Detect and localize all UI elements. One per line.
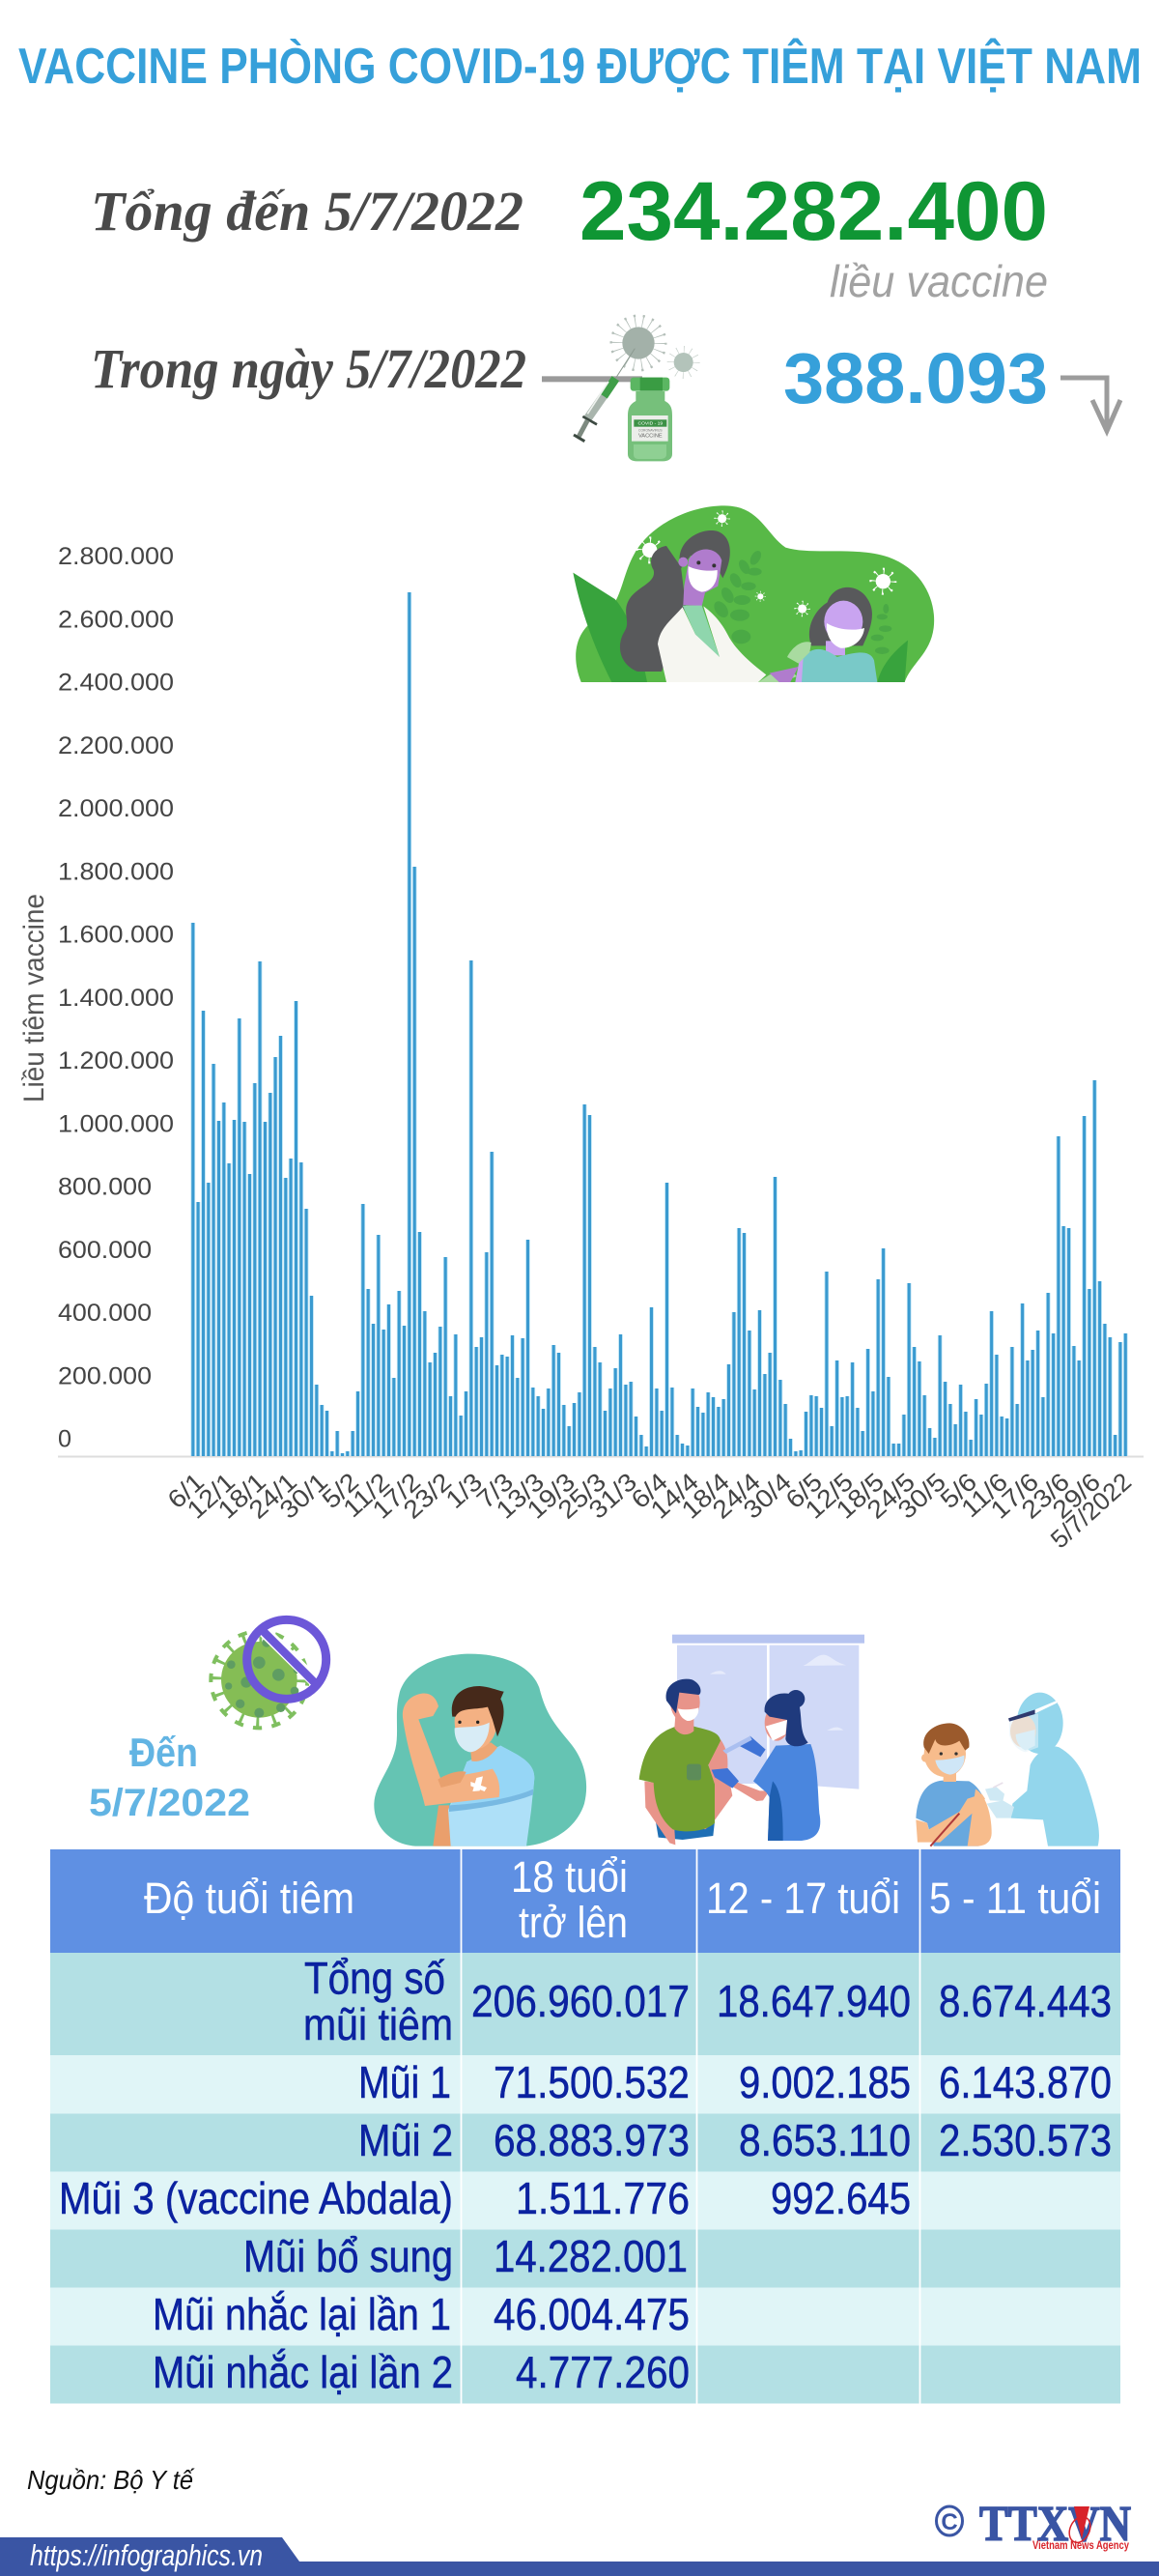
row: dose 2 xyxy=(358,2115,1112,2165)
table header row: 5 - 11 tuổi xyxy=(929,1874,1101,1923)
row: additional dose: Mũi bổ sung xyxy=(243,2231,453,2281)
row: dose 1: 9.002.185 xyxy=(739,2057,911,2107)
x axis date labels: 24/4 xyxy=(707,1467,766,1524)
illustration: window backdrop with teen being vaccinated xyxy=(639,1635,864,1845)
illustration: adult man flexing vaccinated arm xyxy=(374,1654,586,1846)
y axis title: Liều tiêm vaccine xyxy=(18,894,50,1102)
table side heading: 5/7/2022 xyxy=(89,1782,250,1824)
icon: vaccine vial, syringe and viruses: COVID - 19 xyxy=(637,421,663,427)
illustration: child vaccinated by medic in protective suit xyxy=(916,1693,1099,1846)
x axis date labels: 14/4 xyxy=(645,1467,704,1524)
y axis labels: 1.600.000 xyxy=(58,922,174,949)
table side heading xyxy=(89,1730,250,1824)
y axis labels: 1.400.000 xyxy=(58,985,174,1012)
row: dose 3 xyxy=(59,2173,911,2223)
x axis date labels: 30/5 xyxy=(892,1467,951,1524)
x axis date labels: 11/6 xyxy=(955,1467,1013,1523)
footer band with URL xyxy=(0,2537,1159,2576)
row: dose 2: 68.883.973 xyxy=(494,2115,690,2165)
row: dose 1: Mũi 1 xyxy=(358,2057,451,2107)
x axis date labels: 30/4 xyxy=(738,1467,797,1524)
table header row: 12 - 17 tuổi xyxy=(706,1874,900,1923)
nurse xyxy=(712,1690,820,1841)
row: total shots: mũi tiêm xyxy=(303,1999,453,2049)
x axis date labels: 25/3 xyxy=(552,1467,611,1524)
row: booster 2: 4.777.260 xyxy=(516,2347,690,2397)
logo: TTXVN xyxy=(937,2497,1131,2552)
icon: vaccine vial, syringe and viruses: VACCINE xyxy=(638,434,663,440)
x axis date labels: 11/2 xyxy=(337,1467,395,1523)
summary: unit label: liều vaccine xyxy=(830,256,1048,306)
row: dose 2: 8.653.110 xyxy=(739,2115,911,2165)
summary: daily doses number: 388.093 xyxy=(783,338,1048,418)
x axis date labels: 18/4 xyxy=(676,1467,735,1524)
table header row: 18 tuổi xyxy=(511,1852,628,1902)
row: booster 1 xyxy=(153,2289,690,2339)
row: additional dose: 14.282.001 xyxy=(494,2231,688,2281)
row: total shots: 206.960.017 xyxy=(471,1976,690,2026)
row: total shots xyxy=(303,1953,1112,2049)
table header row xyxy=(144,1852,1101,1947)
y axis labels: 2.600.000 xyxy=(58,606,174,633)
bars xyxy=(193,592,1125,1456)
doctor xyxy=(620,530,799,682)
x axis date labels: 5/7/2022 xyxy=(1045,1467,1137,1554)
x axis date labels: 23/6 xyxy=(1016,1467,1075,1524)
child xyxy=(916,1723,992,1846)
summary: total label: Tổng đến 5/7/2022 xyxy=(91,180,523,243)
row: dose 1: 71.500.532 xyxy=(494,2057,690,2107)
x axis date labels: 17/6 xyxy=(985,1467,1044,1524)
y axis labels: 2.800.000 xyxy=(58,543,174,570)
x axis date labels xyxy=(162,1467,1137,1554)
row: dose 3: 1.511.776 xyxy=(516,2173,690,2223)
table: doses by age xyxy=(50,1849,1120,2404)
x axis date labels: 19/3 xyxy=(522,1467,580,1524)
row: dose 1: 6.143.870 xyxy=(939,2057,1112,2107)
green blob background xyxy=(576,505,934,682)
foliage xyxy=(711,549,891,654)
row: booster 1: Mũi nhắc lại lần 1 xyxy=(153,2289,451,2339)
x axis date labels: 12/5 xyxy=(800,1467,859,1524)
x axis date labels: 1/3 xyxy=(440,1467,488,1514)
footer band with URL: https://infographics.vn xyxy=(30,2538,263,2572)
summary: daily label: Trong ngày 5/7/2022 xyxy=(91,337,526,400)
row: total shots: Tổng số xyxy=(304,1953,445,2003)
y axis labels: 2.200.000 xyxy=(58,732,174,759)
x axis date labels: 5/6 xyxy=(935,1467,982,1514)
row: booster 2 xyxy=(153,2347,690,2397)
source note: Nguồn: Bộ Y tế xyxy=(27,2465,195,2495)
y axis labels: 2.400.000 xyxy=(58,669,174,696)
illustration: doctor vaccinating a child xyxy=(573,505,934,682)
y axis labels: 0 xyxy=(58,1426,71,1453)
x axis date labels: 17/2 xyxy=(367,1467,426,1524)
x axis date labels: 6/1 xyxy=(162,1467,210,1514)
row: dose 2: 2.530.573 xyxy=(939,2115,1112,2165)
x axis date labels: 6/4 xyxy=(626,1467,673,1514)
x axis date labels: 24/5 xyxy=(862,1467,920,1524)
x axis date labels: 24/1 xyxy=(243,1467,302,1524)
row: dose 1 xyxy=(358,2057,1112,2107)
row: booster 1: 46.004.475 xyxy=(494,2289,690,2339)
x axis date labels: 18/1 xyxy=(212,1467,271,1524)
x axis date labels: 13/3 xyxy=(491,1467,550,1524)
row: additional dose xyxy=(243,2231,688,2281)
y axis labels: 2.000.000 xyxy=(58,795,174,822)
row: booster 2: Mũi nhắc lại lần 2 xyxy=(153,2347,453,2397)
y axis labels: 1.800.000 xyxy=(58,858,174,885)
icon: vaccine vial, syringe and viruses: CORONAVIRUS xyxy=(638,428,663,432)
logo: TTXVN: TTXVN xyxy=(979,2497,1131,2552)
medic xyxy=(985,1693,1099,1846)
x axis date labels: 30/1 xyxy=(274,1467,333,1524)
logo: TTXVN: Vietnam News Agency xyxy=(1032,2538,1129,2552)
row: total shots: 8.674.443 xyxy=(939,1976,1112,2026)
y axis labels: 800.000 xyxy=(58,1174,152,1201)
row: dose 2: Mũi 2 xyxy=(358,2115,453,2165)
x axis date labels: 31/3 xyxy=(583,1467,642,1524)
y axis labels xyxy=(58,543,174,1453)
x axis date labels: 18/5 xyxy=(831,1467,890,1524)
row: total shots: 18.647.940 xyxy=(717,1976,911,2026)
x axis date labels: 23/2 xyxy=(398,1467,457,1524)
x axis date labels: 12/1 xyxy=(182,1467,240,1524)
teen patient xyxy=(639,1679,732,1845)
table side heading: Đến xyxy=(129,1730,198,1775)
x axis date labels: 7/3 xyxy=(471,1467,519,1514)
table header row: trở lên xyxy=(519,1898,628,1947)
summary: total doses number: 234.282.400 xyxy=(580,165,1048,258)
y axis labels: 1.000.000 xyxy=(58,1110,174,1137)
x axis date labels: 5/2 xyxy=(317,1467,364,1514)
row: dose 3: 992.645 xyxy=(771,2173,911,2223)
table header row: Độ tuổi tiêm xyxy=(144,1874,354,1923)
arrow: daily decrease xyxy=(1060,378,1120,431)
icon: vaccine vial, syringe and viruses xyxy=(542,316,696,461)
y axis labels: 1.200.000 xyxy=(58,1047,174,1074)
x axis date labels: 29/6 xyxy=(1047,1467,1106,1524)
y axis labels: 400.000 xyxy=(58,1300,152,1327)
child xyxy=(787,587,877,682)
x axis date labels: 6/5 xyxy=(780,1467,828,1514)
logo: TTXVN: C xyxy=(941,2509,958,2535)
y axis labels: 200.000 xyxy=(58,1362,152,1389)
y axis labels: 600.000 xyxy=(58,1237,152,1264)
icon: crossed-out virus xyxy=(211,1619,326,1728)
bar chart: daily doses xyxy=(58,543,1144,1554)
row: dose 3: Mũi 3 (vaccine Abdala) xyxy=(59,2173,453,2223)
